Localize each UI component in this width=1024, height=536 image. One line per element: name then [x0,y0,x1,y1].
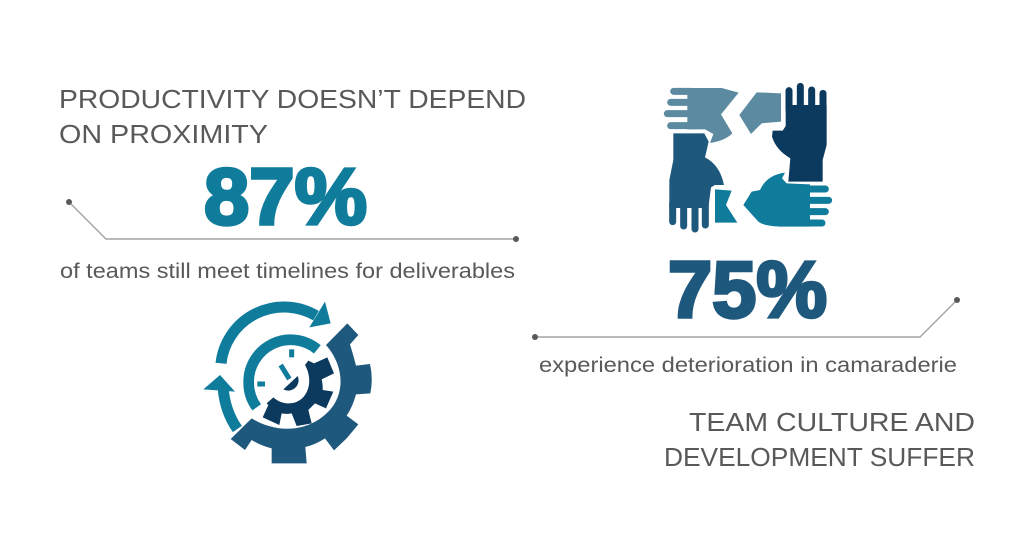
heading: productivity: PRODUCTIVITY DOESN’T DEPEND [59,84,526,114]
description: camaraderie: experience deterioration in camaraderie [539,354,957,377]
heading: productivity: ON PROXIMITY [59,119,268,149]
connector line: left [66,199,519,242]
circular arrow: bottom [203,375,237,429]
statistic: 75%: 75% [668,245,827,334]
icon: four interlocking hands [667,86,829,229]
clock hand and ticks [257,349,292,384]
inner arc [249,340,317,407]
heading: team culture: DEVELOPMENT SUFFER [664,442,975,472]
hand: top right [772,86,827,182]
hand: bottom left [669,133,724,229]
connector line: right [532,297,960,340]
circular arrow: top [221,302,331,363]
hand: bottom right [743,173,829,227]
heading: team culture: TEAM CULTURE AND [689,407,975,437]
description: teams: of teams still meet timelines for deliverables [60,260,515,283]
heading: productivity [59,84,526,149]
icon: gears, clock and arrows [203,302,372,463]
big gear [231,323,372,463]
cuff: top [739,92,781,134]
cuff: bottom [715,189,737,223]
panel: productivity [59,84,526,463]
small gear [263,357,334,426]
panel: team culture [532,86,975,472]
hand: top left [667,88,739,143]
clock face [283,376,299,391]
statistic: 87%: 87% [204,152,367,241]
heading: team culture [664,407,975,472]
